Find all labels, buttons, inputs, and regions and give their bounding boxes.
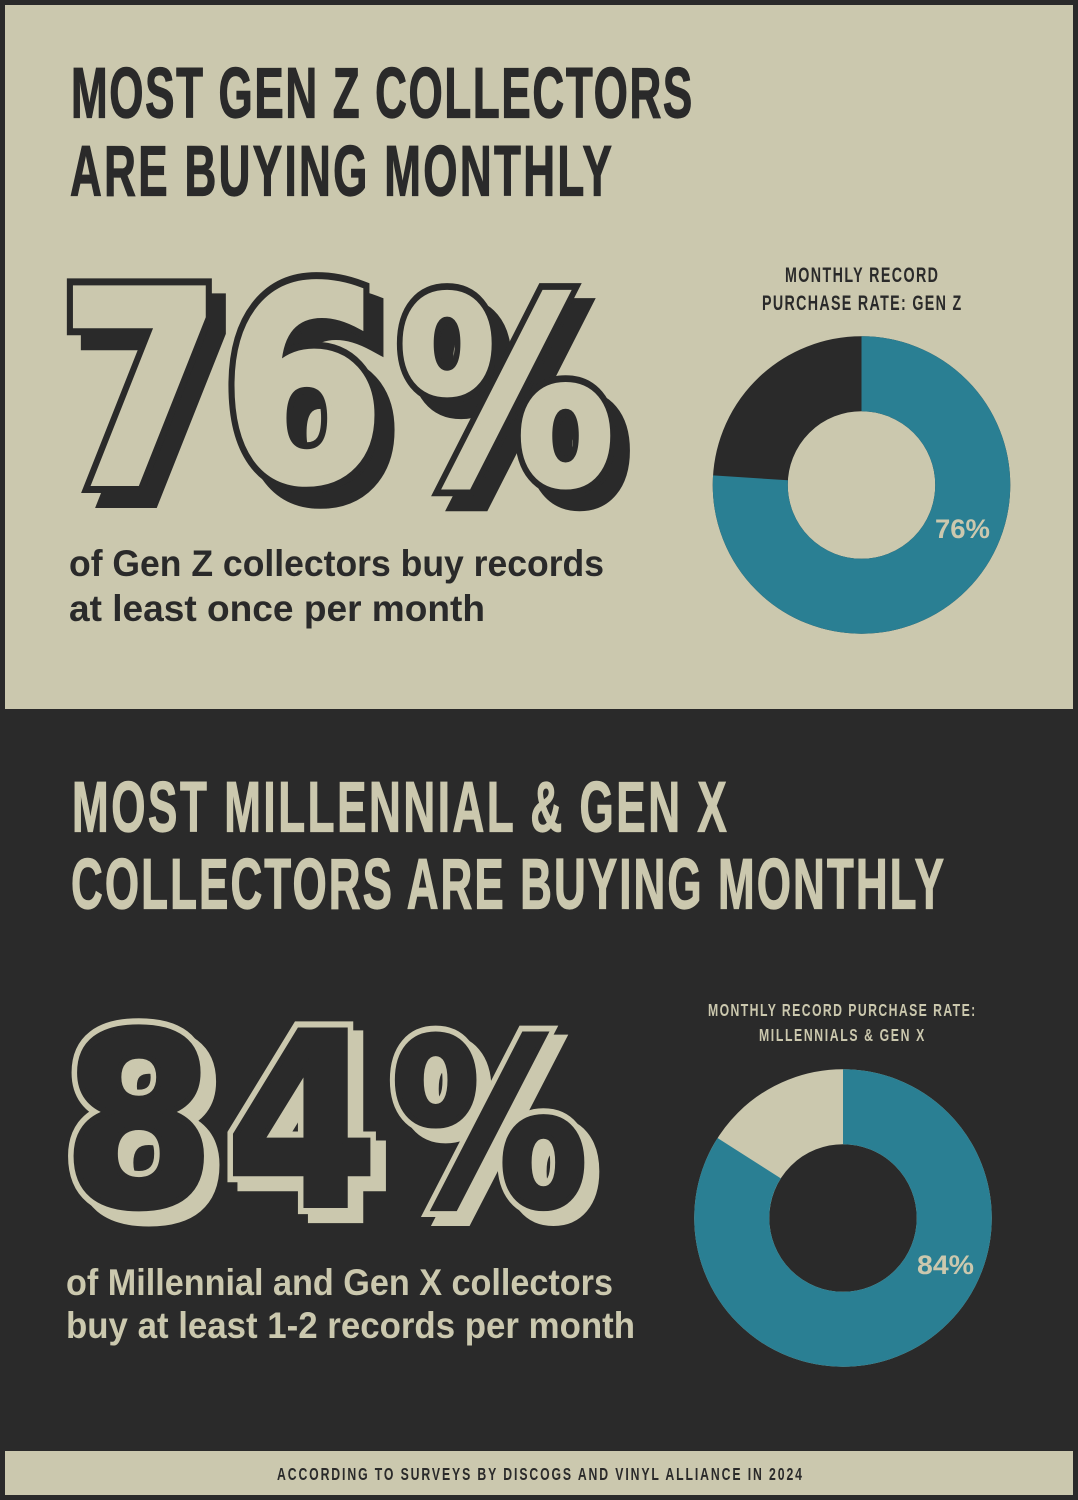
big number: 76%: 76 (60, 234, 384, 547)
description: Millennials and Gen X: of Millennial and Gen X collectors (66, 1262, 613, 1303)
chart title: Millennials and Gen X (708, 1001, 975, 1046)
description: Millennials and Gen X: buy at least 1-2 records per month (66, 1305, 635, 1346)
heading: Millennials and Gen X: COLLECTORS ARE BUYING MONTHLY (71, 845, 944, 924)
big number: 76%: % (398, 245, 615, 544)
heading: Gen Z: ARE BUYING MONTHLY (70, 132, 612, 211)
big number: 76%: 76 (60, 234, 384, 547)
big number: 84%: 84 (63, 982, 378, 1261)
heading: Millennials and Gen X (71, 768, 944, 924)
chart title: Gen Z: PURCHASE RATE: GEN Z (762, 291, 961, 315)
big number: 76%: % (398, 245, 615, 544)
donut chart: Millennials and Gen X 84% (732, 1107, 974, 1329)
footer: source note (5, 1451, 1073, 1495)
footer: source note: ACCORDING TO SURVEYS BY DISCOGS AND VINYL ALLIANCE IN 2024 (277, 1465, 802, 1485)
donut chart: Gen Z 76% (750, 374, 990, 596)
big number: 76%: % (412, 260, 629, 559)
description: Gen Z: of Gen Z collectors buy records (69, 543, 604, 584)
big number: 84%: 84 (73, 991, 388, 1270)
description: Gen Z: at least once per month (69, 588, 485, 629)
chart title: Millennials and Gen X: MILLENNIALS & GEN X (759, 1026, 925, 1046)
panel: Millennials and Gen X (63, 768, 975, 1346)
heading: Millennials and Gen X: MOST MILLENNIAL & GEN X (72, 768, 727, 847)
big number: 84%: 84 (63, 982, 378, 1261)
panel: Gen Z (5, 5, 1073, 709)
big number: 76%: 76 (74, 249, 398, 562)
description: Gen Z (69, 543, 604, 629)
heading: Gen Z: MOST GEN Z COLLECTORS (71, 54, 692, 133)
big number: 84%: % (391, 992, 588, 1260)
big number: 84% (63, 982, 598, 1270)
donut value: 84%: 84% (917, 1250, 974, 1280)
description: Millennials and Gen X (66, 1262, 635, 1346)
big number: 76% (60, 234, 629, 562)
donut value: 76%: 76% (935, 514, 990, 544)
chart title: Gen Z: MONTHLY RECORD (785, 263, 938, 287)
heading: Gen Z (70, 54, 692, 211)
big number: 84%: % (391, 992, 588, 1260)
chart title: Millennials and Gen X: MONTHLY RECORD PURCHASE RATE: (708, 1001, 975, 1021)
chart title: Gen Z (762, 263, 961, 315)
big number: 84%: % (401, 1001, 598, 1269)
